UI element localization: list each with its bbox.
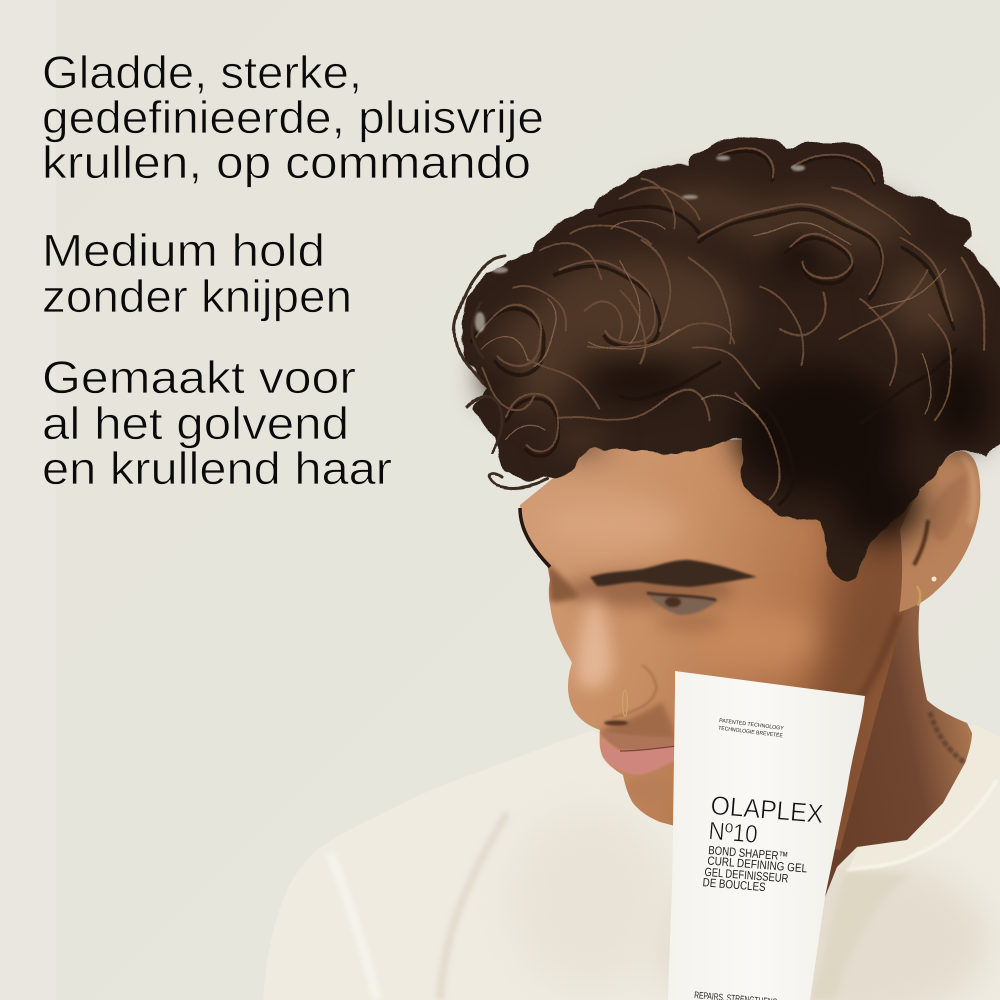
lighter strand highlights bbox=[480, 219, 945, 440]
dark curl strands bbox=[470, 149, 955, 505]
hair lights bbox=[490, 187, 963, 452]
nose highlight bbox=[577, 598, 612, 689]
tube small top text: TECHNOLOGIE BREVETÉE bbox=[718, 724, 784, 739]
nose ring bbox=[623, 690, 627, 716]
face bbox=[520, 440, 916, 850]
neck bbox=[800, 600, 972, 897]
tube product name bbox=[702, 843, 809, 897]
jaw shadow bbox=[860, 615, 898, 698]
photo: man with curly hair bbox=[263, 134, 1000, 1000]
heading block: benefit 3: al het golvend bbox=[42, 398, 349, 449]
mouth bbox=[600, 731, 676, 775]
hair darks bbox=[486, 237, 992, 541]
heading block: benefit 3 bbox=[42, 352, 392, 494]
tube product name: BOND SHAPER™ bbox=[708, 843, 789, 863]
tube brand bbox=[708, 790, 825, 854]
heading block: benefit 2 bbox=[42, 225, 352, 322]
earrings bbox=[917, 576, 936, 606]
eye bbox=[647, 593, 718, 615]
flyaway curls bbox=[454, 254, 548, 488]
hair gaps showing background bbox=[475, 156, 805, 332]
tube product name: DE BOUCLES bbox=[702, 875, 766, 894]
shirt collar bbox=[847, 725, 1000, 872]
tube product name: GEL DEFINISSEUR bbox=[704, 865, 789, 886]
ear bbox=[899, 451, 980, 612]
heading block: benefit 3: Gemaakt voor bbox=[42, 352, 356, 403]
tube brand: Nº10 bbox=[708, 817, 759, 849]
eyebrow bbox=[590, 560, 757, 587]
forehead contour and lashes bbox=[520, 508, 550, 567]
heading block: benefit 1: gedefinieerde, pluisvrije bbox=[42, 92, 544, 143]
tattoo bbox=[930, 712, 965, 763]
temple shadow bbox=[547, 563, 580, 602]
hair silhouette bbox=[462, 134, 1000, 583]
tube small top text bbox=[718, 718, 784, 739]
product tube bbox=[668, 671, 865, 1000]
tube product name: CURL DEFINING GEL bbox=[707, 854, 808, 875]
brown curl strands bbox=[475, 146, 986, 500]
chin shade bbox=[623, 776, 646, 808]
cheek glow bbox=[716, 612, 824, 672]
under nose shadow bbox=[600, 702, 676, 740]
tube small top text: PATENTED TECHNOLOGY bbox=[719, 718, 784, 732]
heading block: benefit 2: zonder knijpen bbox=[42, 271, 352, 322]
nose wing bbox=[612, 665, 656, 718]
heading block: benefit 1: krullen, op commando bbox=[42, 137, 531, 188]
heading block: benefit 3: en krullend haar bbox=[42, 443, 392, 494]
heading block: benefit 1: Gladde, sterke, bbox=[42, 47, 362, 98]
tube brand: OLAPLEX bbox=[710, 790, 825, 829]
hair bbox=[454, 134, 1000, 583]
shirt bbox=[263, 725, 1000, 1000]
eye socket shadow bbox=[565, 573, 735, 607]
right face shadow bbox=[802, 524, 904, 824]
forehead glow bbox=[535, 497, 685, 553]
heading block: benefit 1 bbox=[42, 47, 544, 188]
heading block: benefit 2: Medium hold bbox=[42, 225, 325, 276]
